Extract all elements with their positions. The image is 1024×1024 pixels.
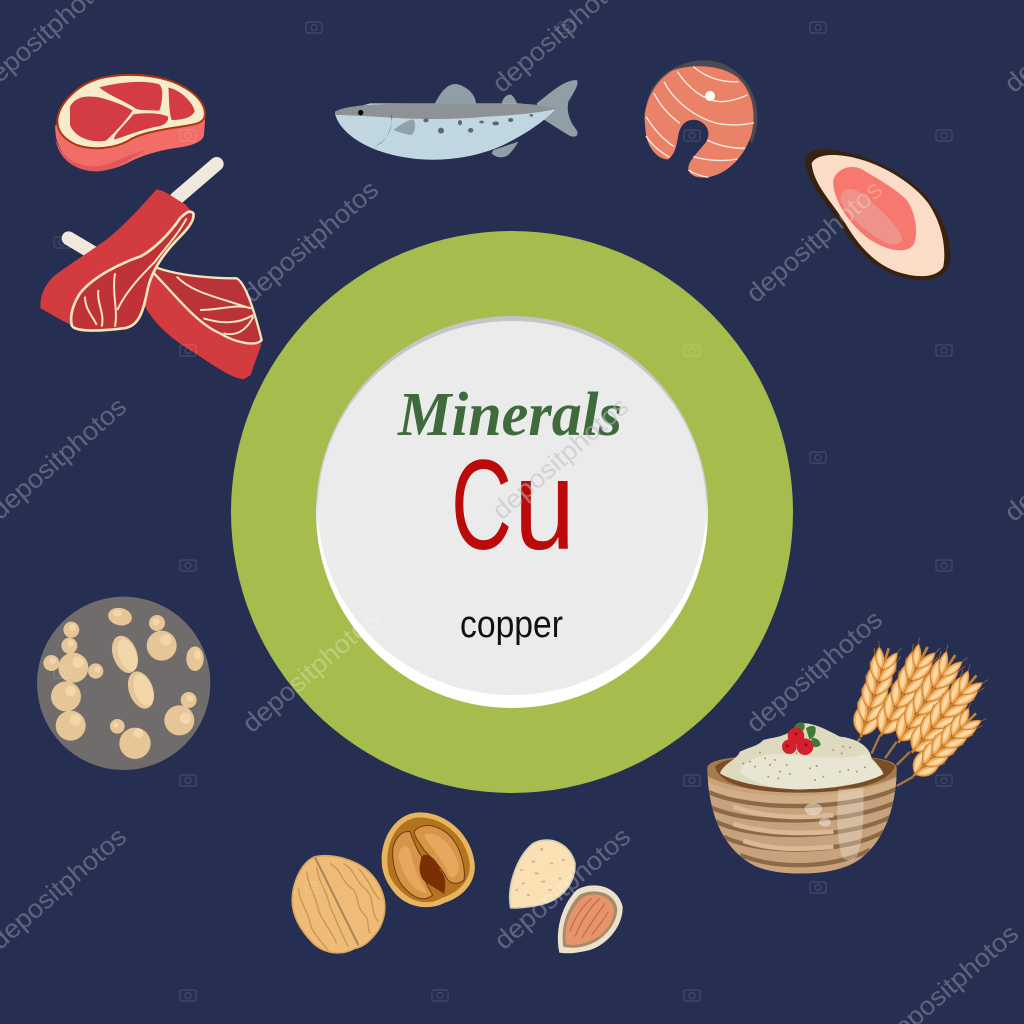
- watermark: depositphotos: depositphotos: [740, 604, 888, 738]
- icon: mussel: [805, 149, 951, 280]
- watermark: depositphotos: depositphotos: [740, 174, 888, 308]
- plate inner surface: [318, 321, 706, 695]
- watermark: depositphotos: depositphotos: [236, 174, 384, 308]
- panel: plate: [231, 231, 793, 793]
- icon: walnut whole: [292, 856, 385, 953]
- watermark: depositphotos: depositphotos: [488, 821, 636, 955]
- heading: Cu symbol: u: [514, 434, 575, 577]
- icon: salmon steak: [645, 60, 757, 178]
- heading: Cu symbol: [451, 433, 575, 577]
- heading: Minerals: Minerals: [397, 381, 622, 449]
- berries and leaves: [782, 722, 821, 755]
- icon: bowl of porridge: [707, 722, 897, 874]
- icon: walnut open: [382, 812, 475, 907]
- text: copper: copper: [460, 604, 563, 646]
- heading: Cu symbol: C: [451, 433, 512, 576]
- icon: beef steak: [55, 75, 206, 171]
- icon: almond half: [558, 885, 623, 953]
- icon: fish: [335, 80, 578, 160]
- watermark: depositphotos: depositphotos: [236, 604, 384, 738]
- icon: wheat ears: [847, 636, 990, 786]
- watermark: depositphotos: depositphotos: [486, 391, 634, 525]
- icon: almond whole: [510, 840, 575, 908]
- icon: lamb chops: [40, 164, 262, 379]
- icon: yeast cells: [37, 597, 210, 770]
